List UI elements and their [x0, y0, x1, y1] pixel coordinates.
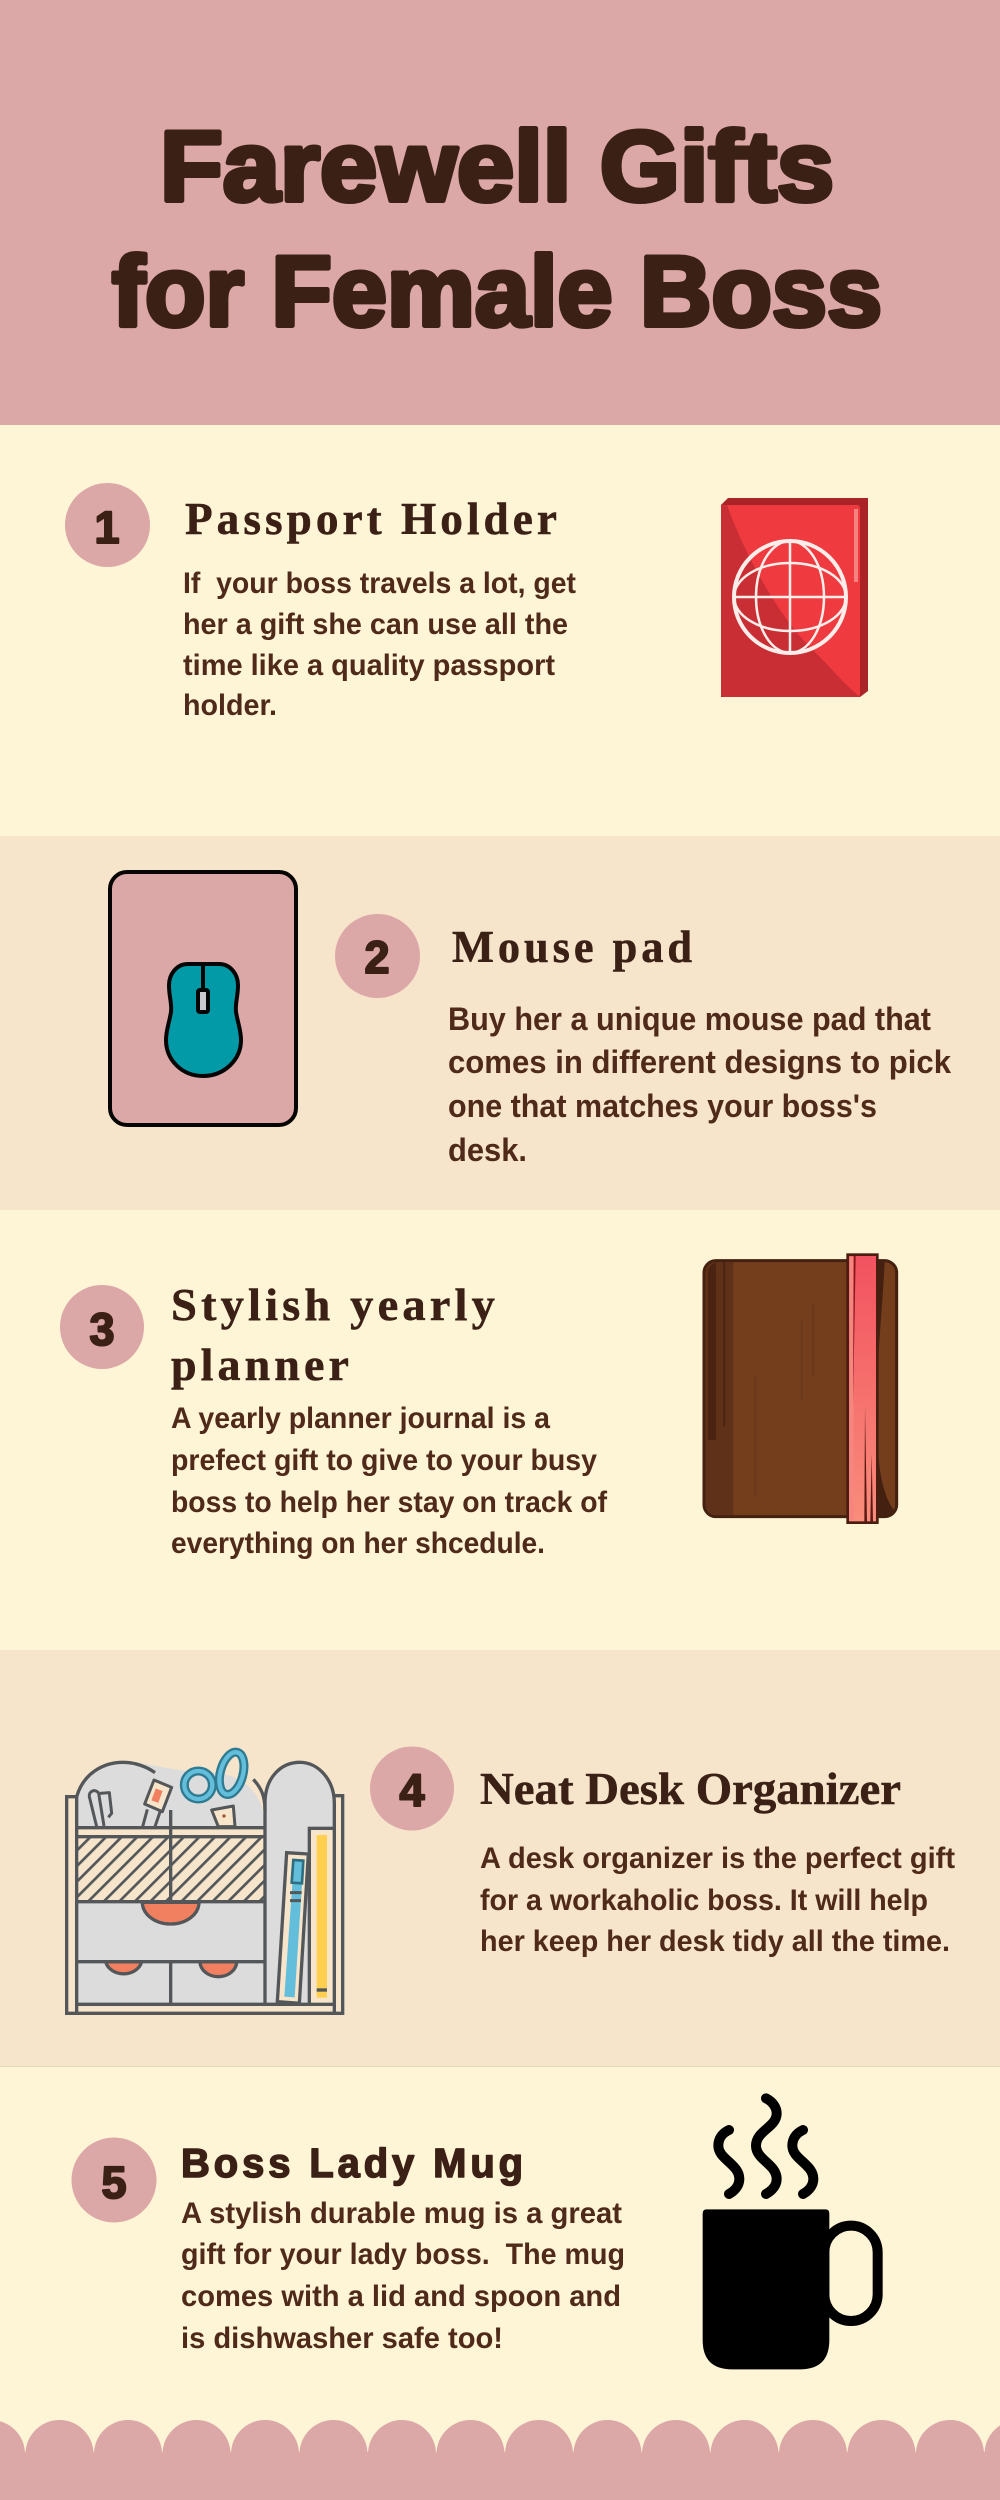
icon: planner notebook	[704, 1255, 897, 1523]
panel: mouse pad	[0, 836, 1000, 1210]
pen, cutter and scissors	[89, 1780, 235, 1827]
number badge 1	[65, 483, 150, 567]
text: mug description: is dishwasher safe too!	[181, 2322, 503, 2355]
text: mouse pad description: desk.	[448, 1132, 527, 1168]
text: planner description	[171, 1402, 608, 1560]
yellow book	[309, 1828, 334, 2004]
text: mouse pad description: comes in different designs to pick	[448, 1044, 951, 1080]
pen holder backing	[77, 1762, 265, 1828]
title: for Female Boss	[112, 236, 882, 346]
text: organizer description: her keep her desk tidy all the time.	[480, 1925, 950, 1958]
text: passport holder description	[183, 567, 576, 722]
title: Farewell Gifts	[160, 110, 834, 222]
panel: boss lady mug	[0, 2066, 1000, 2500]
number badge 4	[370, 1746, 454, 1830]
blue book	[277, 1853, 308, 2003]
number badge 3: 3	[89, 1304, 115, 1355]
heading: passport holder: Passport Holder	[185, 494, 561, 544]
text: mouse pad description	[448, 1001, 951, 1168]
number badge 3	[60, 1285, 144, 1369]
text: mug description: comes with a lid and spoon and	[181, 2280, 621, 2313]
number badge 2	[335, 914, 420, 998]
heading: boss lady mug: Boss Lady Mug	[181, 2140, 527, 2186]
text: planner description: A yearly planner journal is a	[171, 1402, 550, 1435]
icon: desk organizer	[67, 1749, 343, 2013]
number badge 5: 5	[101, 2157, 127, 2208]
heading: mouse pad: Mouse pad	[452, 922, 696, 972]
heading: stylish yearly planner: planner	[171, 1340, 353, 1390]
salmon drawer pulls	[106, 1902, 237, 1977]
text: passport holder description: holder.	[183, 689, 277, 722]
number badge 5	[72, 2138, 156, 2222]
text: organizer description: A desk organizer is the perfect gift	[480, 1842, 955, 1875]
icon: steaming mug	[703, 2098, 878, 2369]
text: passport holder description: time like a quality passport	[183, 649, 555, 682]
heading: stylish yearly planner: Stylish yearly	[171, 1280, 499, 1330]
text: mug description: gift for your lady boss. The mug	[181, 2238, 625, 2271]
text: planner description: prefect gift to give to your busy	[171, 1444, 597, 1477]
text: mug description	[181, 2197, 625, 2355]
organizer frame lines	[67, 1762, 343, 2013]
panel: desk organizer	[0, 1650, 1000, 2066]
text: organizer description	[480, 1842, 955, 1958]
text: passport holder description: If your boss travels a lot, get	[183, 567, 576, 600]
heading: stylish yearly planner	[171, 1280, 499, 1390]
panel: passport holder	[0, 425, 1000, 836]
number badge 1: 1	[94, 502, 120, 553]
number badge 4: 4	[399, 1765, 425, 1816]
text: mug description: A stylish durable mug is a great	[181, 2197, 622, 2230]
text: planner description: everything on her shcedule.	[171, 1527, 545, 1560]
number badge 2: 2	[364, 932, 390, 983]
heading: neat desk organizer: Neat Desk Organizer	[480, 1764, 901, 1814]
text: planner description: boss to help her stay on track of	[171, 1486, 608, 1519]
text: mouse pad description: one that matches your boss's	[448, 1088, 877, 1124]
panel: yearly planner	[0, 1210, 1000, 1650]
icon: mouse pad and mouse	[110, 872, 296, 1125]
footer scallop band	[0, 2420, 1000, 2500]
text: organizer description: for a workaholic boss. It will help	[480, 1884, 928, 1917]
icon: passport	[721, 498, 868, 697]
text: passport holder description: her a gift she can use all the	[183, 608, 568, 641]
header panel	[0, 0, 1000, 425]
title	[112, 110, 882, 346]
text: mouse pad description: Buy her a unique mouse pad that	[448, 1001, 931, 1037]
